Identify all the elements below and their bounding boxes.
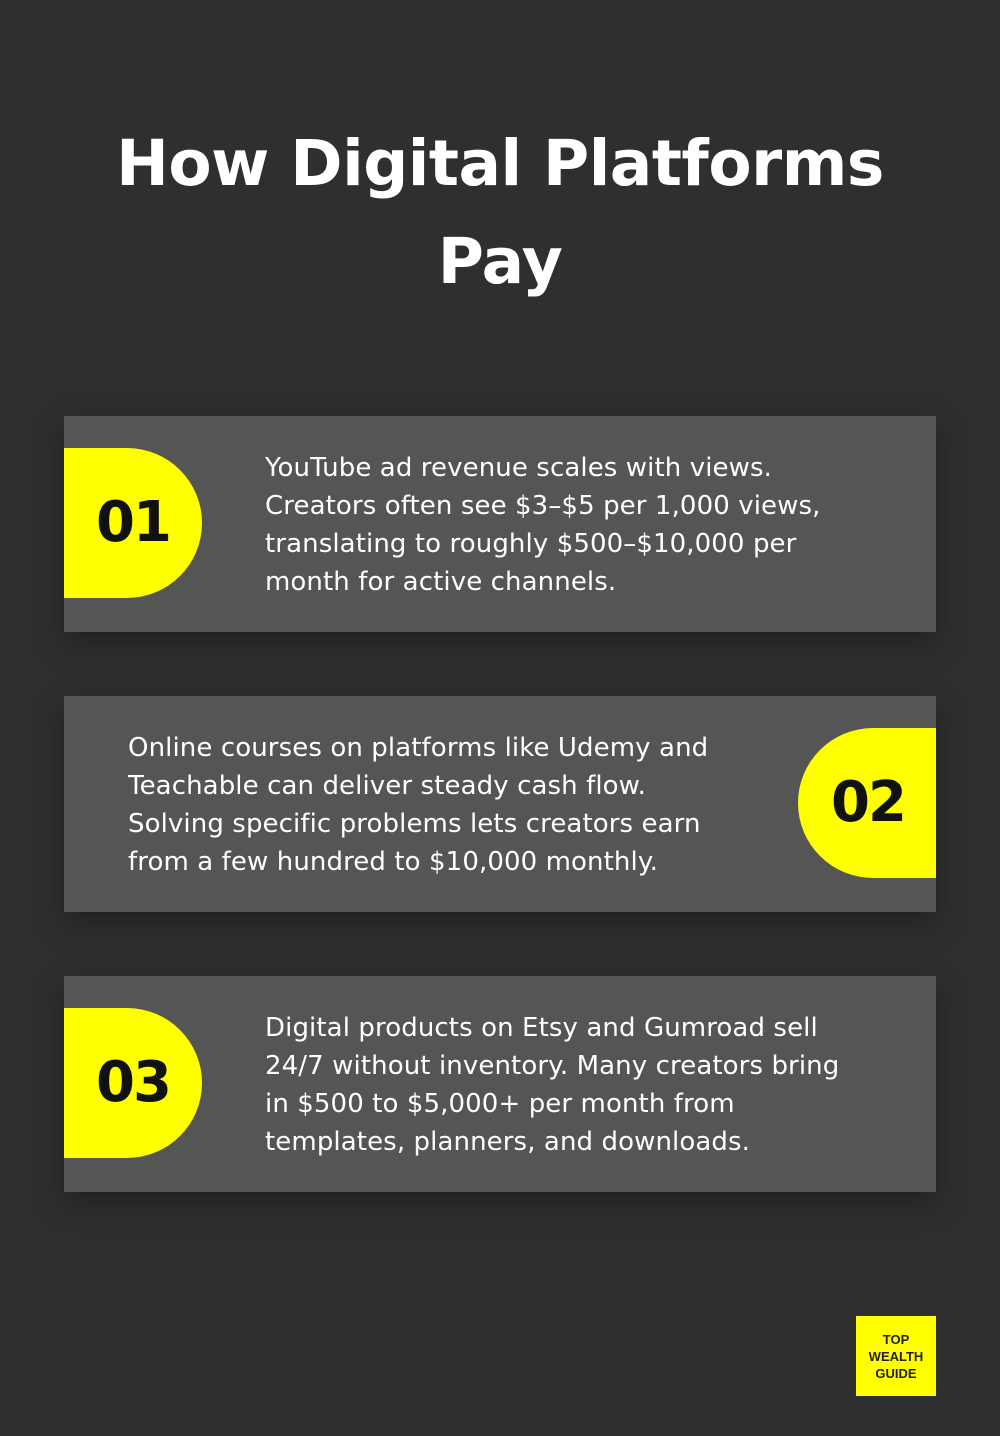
text 01: month for active channels. bbox=[265, 567, 616, 597]
text 02: Solving specific problems lets creators earn bbox=[128, 809, 701, 839]
text 02 bbox=[128, 733, 708, 877]
badge 01 bbox=[64, 448, 202, 598]
badge 03 bbox=[64, 1008, 202, 1158]
logo bbox=[856, 1316, 936, 1396]
panel: 03 bbox=[64, 976, 936, 1192]
panel: 02 bbox=[64, 696, 936, 912]
title: How Digital Platforms bbox=[116, 127, 884, 200]
text 01: YouTube ad revenue scales with views. bbox=[265, 453, 772, 483]
logo: GUIDE bbox=[875, 1366, 917, 1381]
logo: TOP bbox=[883, 1332, 909, 1347]
text 01: translating to roughly $500–$10,000 per bbox=[265, 529, 796, 559]
title bbox=[116, 127, 884, 298]
panel: 01 bbox=[64, 416, 936, 632]
title: Pay bbox=[438, 225, 562, 298]
text 01: Creators often see $3–$5 per 1,000 views, bbox=[265, 491, 821, 521]
text 02: from a few hundred to $10,000 monthly. bbox=[128, 847, 658, 877]
logo: WEALTH bbox=[869, 1349, 923, 1364]
badge 03: 03 bbox=[96, 1050, 170, 1115]
badge 01: 01 bbox=[96, 490, 170, 555]
text 02: Teachable can deliver steady cash flow. bbox=[128, 771, 646, 801]
text 03: 24/7 without inventory. Many creators bring bbox=[265, 1051, 839, 1081]
text 02: Online courses on platforms like Udemy and bbox=[128, 733, 708, 763]
badge 02: 02 bbox=[831, 770, 905, 835]
text 03: Digital products on Etsy and Gumroad sell bbox=[265, 1013, 818, 1043]
text 01 bbox=[265, 453, 821, 597]
text 03: templates, planners, and downloads. bbox=[265, 1127, 750, 1157]
text 03 bbox=[265, 1013, 839, 1157]
text 03: in $500 to $5,000+ per month from bbox=[265, 1089, 735, 1119]
badge 02 bbox=[798, 728, 936, 878]
